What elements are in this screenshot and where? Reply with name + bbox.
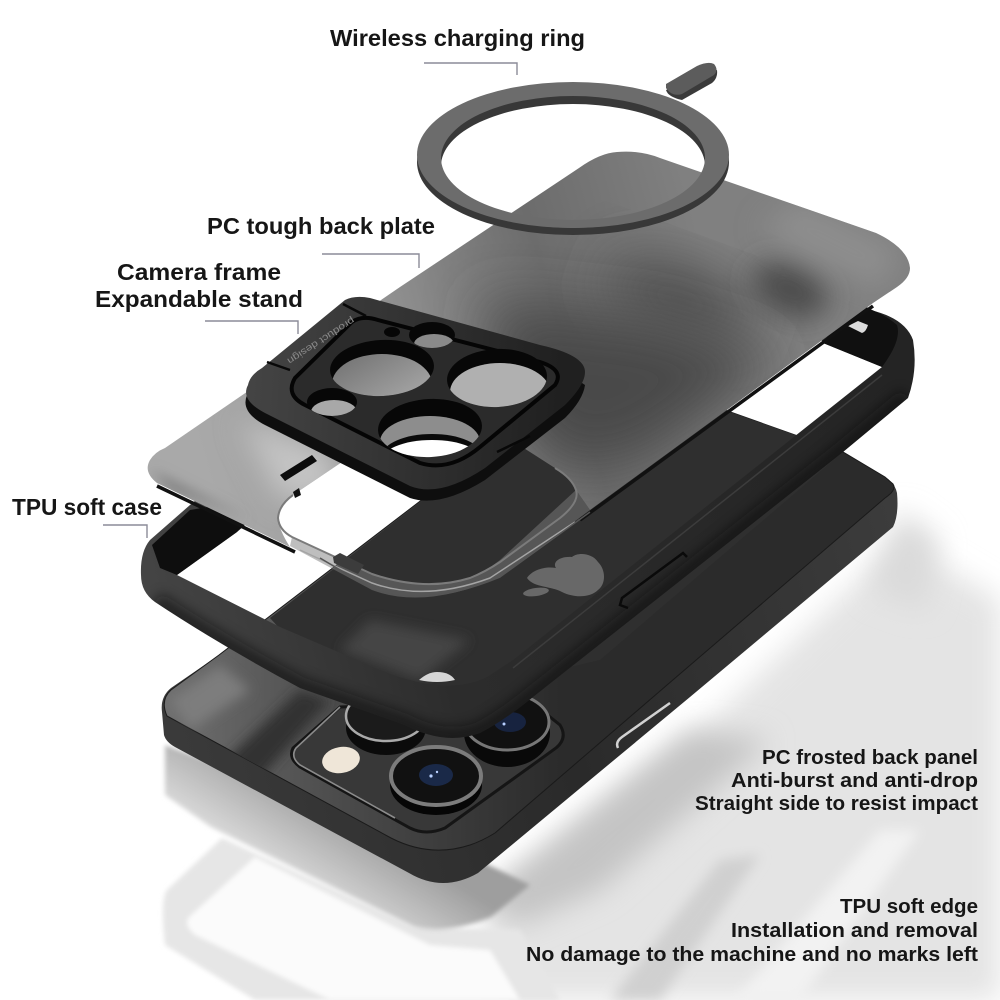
label: wireless charging ring: Wireless charging ring	[330, 25, 585, 51]
leader line: camera frame	[205, 321, 298, 334]
clear rim	[290, 490, 590, 598]
phone back face	[164, 365, 894, 850]
label: TPU soft case: TPU soft case	[12, 494, 162, 520]
frame underside	[245, 308, 585, 501]
frame body	[141, 200, 915, 738]
phone	[162, 365, 897, 883]
inner groove and plate	[292, 318, 558, 465]
text block: TPU soft edge: Installation and removal	[731, 920, 978, 942]
silver dot	[419, 672, 455, 682]
label: back plate: PC tough back plate	[207, 213, 435, 239]
plate thickness	[157, 306, 873, 552]
hinge lines	[267, 304, 530, 452]
reflection bands on back face	[166, 620, 464, 772]
phone side wall	[162, 365, 897, 883]
ring tab	[666, 63, 717, 100]
ring face	[417, 82, 729, 228]
far inner wall right	[823, 303, 898, 367]
stand hinge tab	[333, 553, 364, 574]
left lens	[346, 691, 426, 755]
text block: TPU soft edge: TPU soft edge	[840, 896, 978, 918]
flash	[320, 744, 362, 776]
frosted tonal blobs	[150, 200, 900, 520]
camera bump	[292, 700, 563, 832]
frame top face	[246, 297, 585, 489]
lens hole bottom	[378, 398, 482, 458]
inner crease highlight	[513, 375, 882, 668]
text block: TPU soft edge	[526, 896, 978, 966]
wireless charging ring	[417, 63, 729, 235]
engraved text: product design	[285, 314, 356, 366]
label: expandable stand: Expandable stand	[95, 286, 303, 312]
leader line: TPU	[103, 525, 147, 538]
label: camera frame: Camera frame	[117, 259, 281, 285]
frosted body	[148, 152, 910, 547]
back seen through the frame	[270, 365, 843, 700]
camera frame stand	[245, 297, 585, 501]
phone edge highlight button	[617, 703, 670, 748]
text block: PC frosted back panel: Anti-burst and anti-drop	[731, 770, 978, 792]
apple logo	[523, 554, 604, 598]
text block: TPU soft edge: No damage to the machine and no marks left	[526, 944, 978, 966]
far inner wall left	[152, 500, 262, 575]
leader line: back plate	[322, 254, 419, 268]
lens hole flash	[307, 388, 357, 416]
text block: PC frosted back panel: Straight side to resist impact	[695, 793, 978, 815]
mic hole	[384, 327, 400, 337]
text block: PC frosted back panel: PC frosted back panel	[762, 747, 978, 769]
ring side	[417, 89, 729, 235]
right lens	[464, 694, 550, 767]
lens hole large	[330, 340, 434, 396]
lower side shading	[155, 398, 908, 738]
leader line: ring	[424, 63, 517, 75]
mute switch slot	[620, 553, 687, 608]
rim lines	[278, 468, 577, 584]
TPU soft case frame	[140, 307, 915, 738]
hinge slot	[280, 455, 317, 481]
text block: PC frosted back panel	[695, 747, 978, 815]
lens hole right	[447, 348, 547, 408]
front lens	[390, 747, 482, 815]
PC tough back plate	[148, 152, 910, 598]
slot in far wall	[848, 321, 868, 333]
notch	[293, 488, 301, 498]
bump highlight	[294, 707, 395, 818]
lens hole small	[409, 322, 455, 348]
